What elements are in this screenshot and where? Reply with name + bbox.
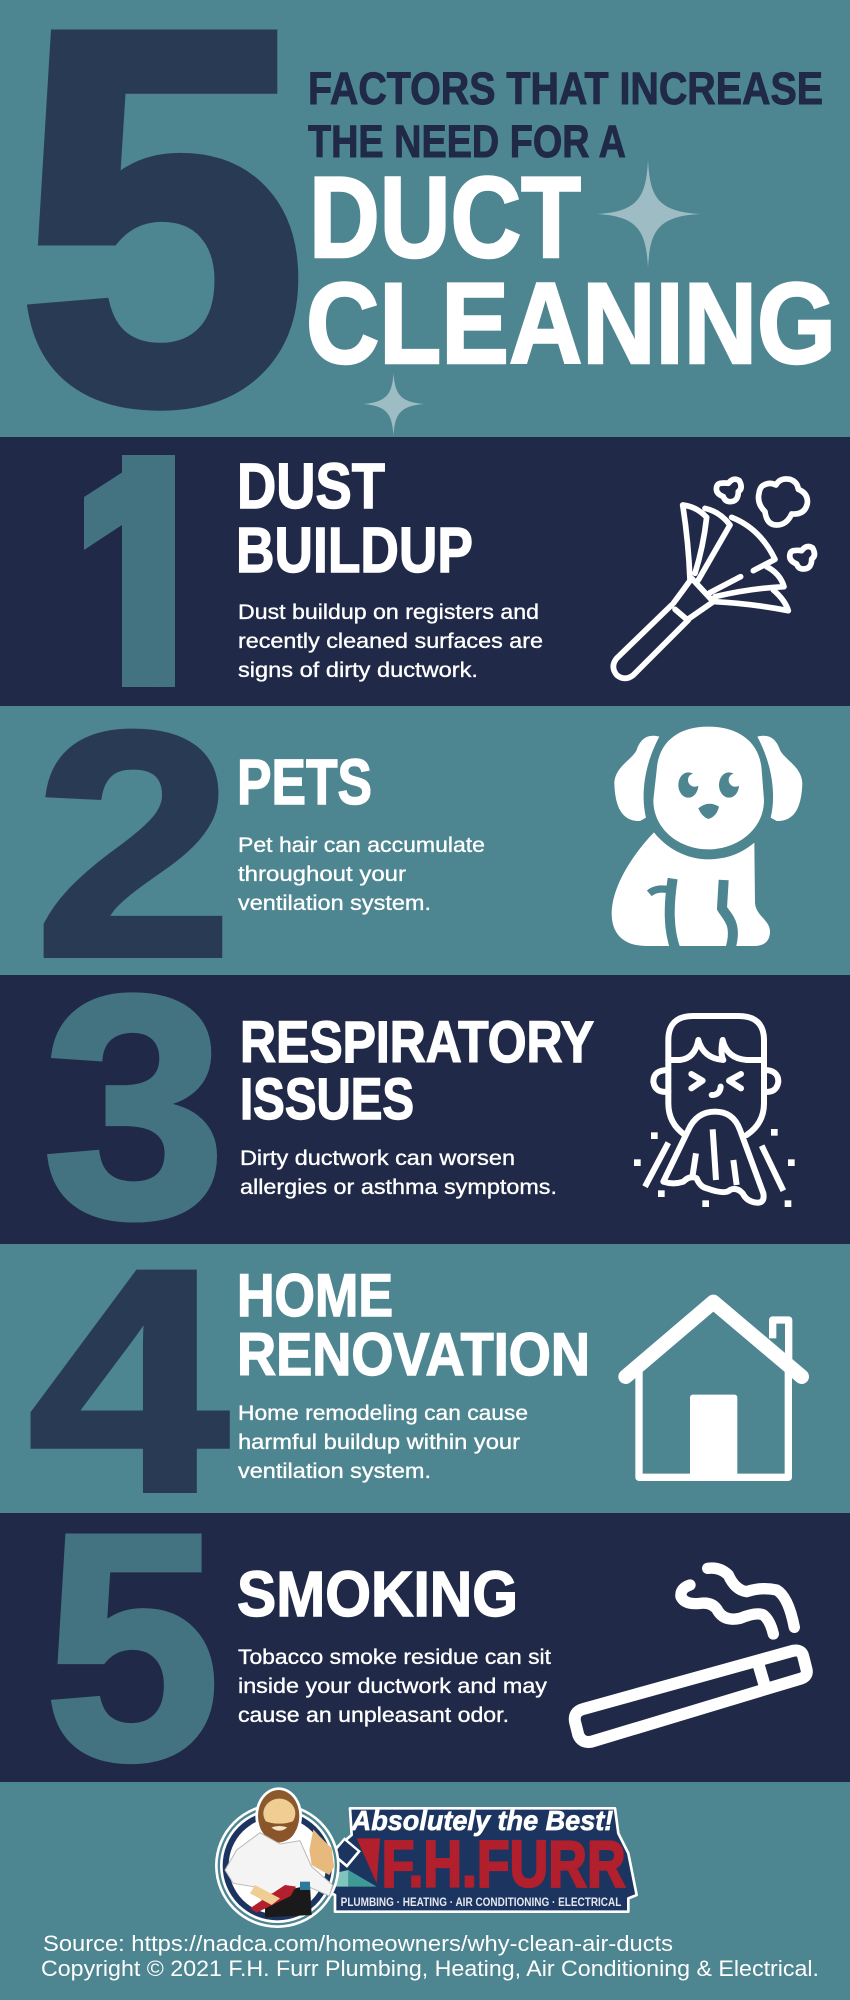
text: renovation description: Home remodeling can cause — [238, 1402, 528, 1425]
text: dust description: recently cleaned surfaces are — [238, 630, 543, 653]
heading: factors: THE NEED FOR A — [308, 116, 626, 167]
heading: home renovation: RENOVATION — [237, 1321, 590, 1388]
text: source and copyright — [41, 1931, 819, 1981]
text: smoking description — [238, 1646, 551, 1727]
heading: pets: PETS — [237, 746, 372, 818]
heading: respiratory issues: RESPIRATORY — [240, 1010, 594, 1075]
text: dust description: Dust buildup on registers and — [238, 601, 539, 624]
icon: sneezing person — [634, 1016, 795, 1207]
panel: header — [16, 0, 836, 513]
logo badge — [325, 1805, 637, 1912]
heading: respiratory issues — [240, 1010, 594, 1132]
text: renovation description: harmful buildup within your — [238, 1431, 520, 1454]
text: source and copyright: Copyright © 2021 F.H. Furr Plumbing, Heating, Air Conditioning & Electrical. — [41, 1956, 819, 1981]
logo mascot — [215, 1787, 340, 1928]
text: smoking description: cause an unpleasant odor. — [238, 1704, 509, 1727]
heading: smoking: SMOKING — [237, 1558, 518, 1630]
logo badge: PLUMBING · HEATING · AIR CONDITIONING · ELECTRICAL — [341, 1895, 621, 1909]
heading: duct cleaning: DUCT — [309, 154, 581, 282]
number 4: 4 — [28, 1204, 231, 1557]
number 1 — [84, 455, 175, 687]
icon: feather duster — [613, 479, 814, 678]
text: dust description: signs of dirty ductwork. — [238, 659, 478, 682]
heading: dust buildup: BUILDUP — [236, 514, 473, 586]
icon: cigarette — [575, 1568, 807, 1742]
panel: respiratory issues — [0, 931, 850, 1284]
text: renovation description — [238, 1402, 528, 1483]
text: pets description: throughout your — [238, 863, 406, 886]
text: pets description: Pet hair can accumulate — [238, 834, 485, 857]
panel: dust buildup — [0, 437, 850, 706]
heading: respiratory issues: ISSUES — [240, 1067, 414, 1132]
text: respiratory description — [240, 1147, 557, 1199]
panel: home renovation — [0, 1204, 850, 1557]
panel: pets — [0, 665, 850, 1023]
panel: smoking — [0, 1466, 850, 1827]
text: source and copyright: Source: https://nadca.com/homeowners/why-clean-air-ducts — [43, 1931, 673, 1956]
logo badge: Absolutely the Best! — [351, 1805, 613, 1836]
heading: dust buildup — [236, 450, 473, 586]
text: pets description — [238, 834, 485, 915]
number 5: 5 — [45, 1466, 220, 1827]
number 3: 3 — [43, 931, 226, 1284]
heading: factors — [308, 63, 823, 167]
text: renovation description: ventilation system. — [238, 1460, 431, 1483]
icon: sparkle small — [363, 373, 424, 436]
text: pets description: ventilation system. — [238, 892, 431, 915]
text: smoking description: Tobacco smoke residue can sit — [238, 1646, 551, 1669]
number 2: 2 — [35, 665, 233, 1023]
logo badge: F.H.FURR — [382, 1827, 626, 1901]
text: dust description — [238, 601, 543, 682]
icon: house — [626, 1302, 802, 1480]
number 1: 1 — [42, 393, 258, 773]
logo: F.H. Furr — [215, 1787, 637, 1928]
text: respiratory description: Dirty ductwork can worsen — [240, 1147, 515, 1170]
text: respiratory description: allergies or asthma symptoms. — [240, 1176, 557, 1199]
heading: duct cleaning — [306, 154, 836, 388]
text: smoking description: inside your ductwork and may — [238, 1675, 548, 1698]
heading: home renovation — [237, 1262, 590, 1388]
heading: home renovation: HOME — [237, 1262, 393, 1329]
icon: puppy — [612, 727, 802, 950]
heading: dust buildup: DUST — [237, 450, 385, 522]
icon: sparkle large — [596, 160, 701, 268]
